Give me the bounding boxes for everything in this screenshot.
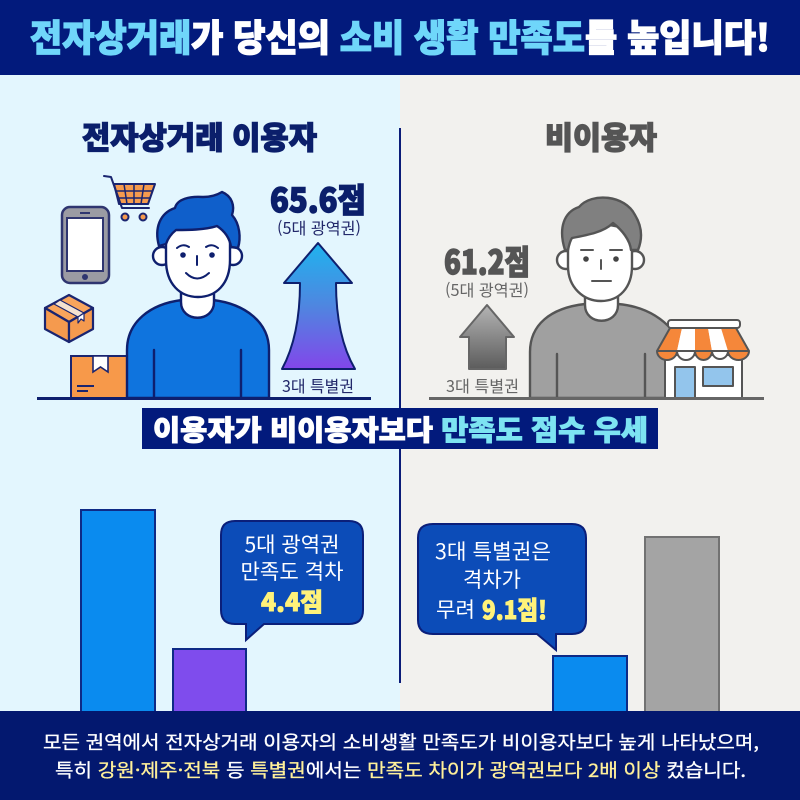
bar chart: 3 special area gap [553, 537, 719, 715]
callout: 4.4 point gap: 4.4점 [261, 583, 323, 619]
callout: 4.4 point gap: 5대 광역권 [244, 529, 340, 559]
callout: 9.1 point gap: 격차가 [463, 564, 521, 594]
callout: 9.1 point gap: 무려 [436, 594, 475, 624]
panel: left background [0, 75, 400, 715]
label: 5 metropolitan areas, users: (5대 광역권) [277, 215, 361, 239]
footer banner [0, 711, 800, 800]
callout: 4.4 point gap: 만족도 격차 [240, 556, 344, 586]
icon: shopping cart [104, 176, 155, 220]
callout: 9.1 point gap: 3대 특별권은 [435, 536, 551, 566]
heading: e-commerce users: 전자상거래 이용자 [82, 113, 317, 158]
bar chart: 5 metropolitan gap [81, 510, 246, 715]
ears [557, 251, 575, 269]
divider line [399, 128, 401, 683]
callout: 9.1 point gap [418, 524, 586, 650]
conclusion text: 이용자가 비이용자보다 만족도 점수 우세 [153, 409, 648, 449]
illustration: neutral non-user [530, 198, 672, 398]
eyes and mouth [583, 256, 589, 262]
hair [562, 198, 641, 250]
icon: parcel box floating [45, 295, 93, 342]
neck [585, 290, 618, 321]
ground line left [37, 397, 371, 400]
label: 3 special areas, non-users: 3대 특별권 [446, 373, 519, 397]
ground line right [429, 397, 764, 400]
score: users 65.6: 65.6점 [270, 174, 366, 222]
label: 5 metropolitan areas, non-users: (5대 광역권) [445, 277, 529, 301]
eyes and mouth [180, 252, 186, 258]
footer line 1: 모든 권역에서 전자상거래 이용자의 소비생활 만족도가 비이용자보다 높게 나타났으며, [43, 729, 759, 755]
body [127, 300, 269, 398]
face [568, 224, 632, 301]
illustration: smiling user [127, 192, 269, 398]
title banner [0, 0, 800, 75]
icon: storefront [657, 320, 749, 398]
hair [157, 192, 240, 248]
heading: non-users: 비이용자 [545, 113, 657, 158]
callout: 9.1 point gap: 9.1점! [482, 591, 547, 627]
label: 3 special areas, users: 3대 특별권 [282, 373, 354, 397]
icon: parcel box on the ground [71, 356, 130, 398]
face [166, 222, 230, 297]
conclusion banner [142, 408, 658, 449]
icon: smartphone [62, 207, 109, 283]
ears [153, 247, 171, 265]
neck [181, 285, 214, 318]
arrow: non-users [460, 305, 514, 369]
title: 전자상거래가 당신의 소비 생활 만족도를 높입니다! [30, 8, 770, 62]
body [530, 304, 672, 398]
panel: right background [400, 75, 800, 715]
arrow: users [282, 243, 355, 369]
score: non-users 61.2: 61.2점 [444, 236, 530, 284]
footer line 2: 특히 강원·제주·전북 등 특별권에서는 만족도 차이가 광역권보다 2배 이상 컸습니다. [55, 757, 746, 783]
callout: 4.4 point gap [221, 521, 363, 640]
